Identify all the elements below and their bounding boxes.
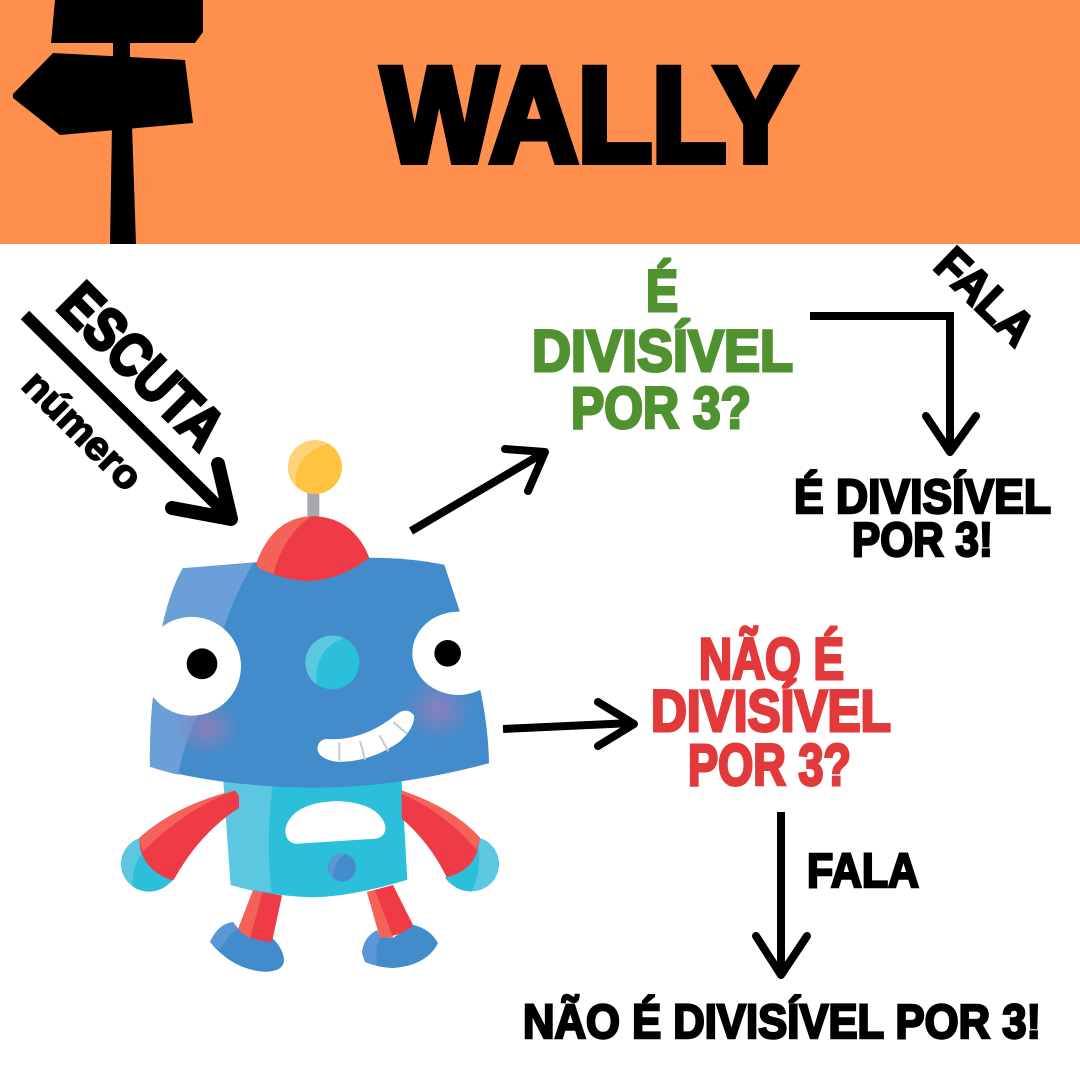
answer: not divisible: NÃO É DIVISÍVEL POR 3!	[523, 994, 1041, 1049]
arrow: fala to divisible answer	[810, 316, 976, 452]
robot eyes	[142, 617, 241, 716]
answer: divisible: É DIVISÍVEL	[794, 470, 1051, 524]
label: numero: número	[14, 362, 151, 499]
arrow: to not divisible question	[503, 702, 634, 746]
answer: divisible: POR 3!	[852, 514, 993, 567]
robot hat	[257, 516, 369, 581]
question: not divisible: POR 3?	[688, 733, 851, 798]
title: WALLY	[382, 41, 796, 190]
robot left hand	[121, 837, 176, 892]
robot smile	[317, 711, 414, 762]
question: divisible	[532, 259, 793, 441]
robot third eye	[305, 635, 359, 689]
question: not divisible	[651, 627, 891, 798]
question: divisible: DIVISÍVEL	[532, 319, 793, 384]
answer: divisible	[794, 470, 1051, 567]
robot antenna	[288, 440, 342, 519]
question: divisible: É	[646, 259, 678, 324]
arrow: to divisible question	[411, 449, 545, 531]
question: not divisible: DIVISÍVEL	[651, 679, 891, 744]
robot head	[142, 516, 504, 788]
robot feet	[210, 922, 438, 972]
robot arms	[139, 790, 480, 880]
label: fala rotated: FALA	[924, 238, 1045, 356]
robot illustration	[121, 440, 504, 972]
arrow: fala to not divisible answer	[756, 812, 807, 975]
robot body	[223, 780, 407, 897]
label: fala: FALA	[807, 845, 919, 898]
robot right hand	[444, 837, 499, 891]
header banner	[0, 0, 1080, 244]
label: escuta: ESCUTA	[46, 270, 238, 462]
arrow: input into robot	[25, 315, 231, 519]
question: not divisible: NÃO É	[699, 627, 844, 692]
question: divisible: POR 3?	[571, 376, 751, 441]
icon: signpost	[13, 0, 203, 244]
robot legs	[238, 885, 413, 942]
